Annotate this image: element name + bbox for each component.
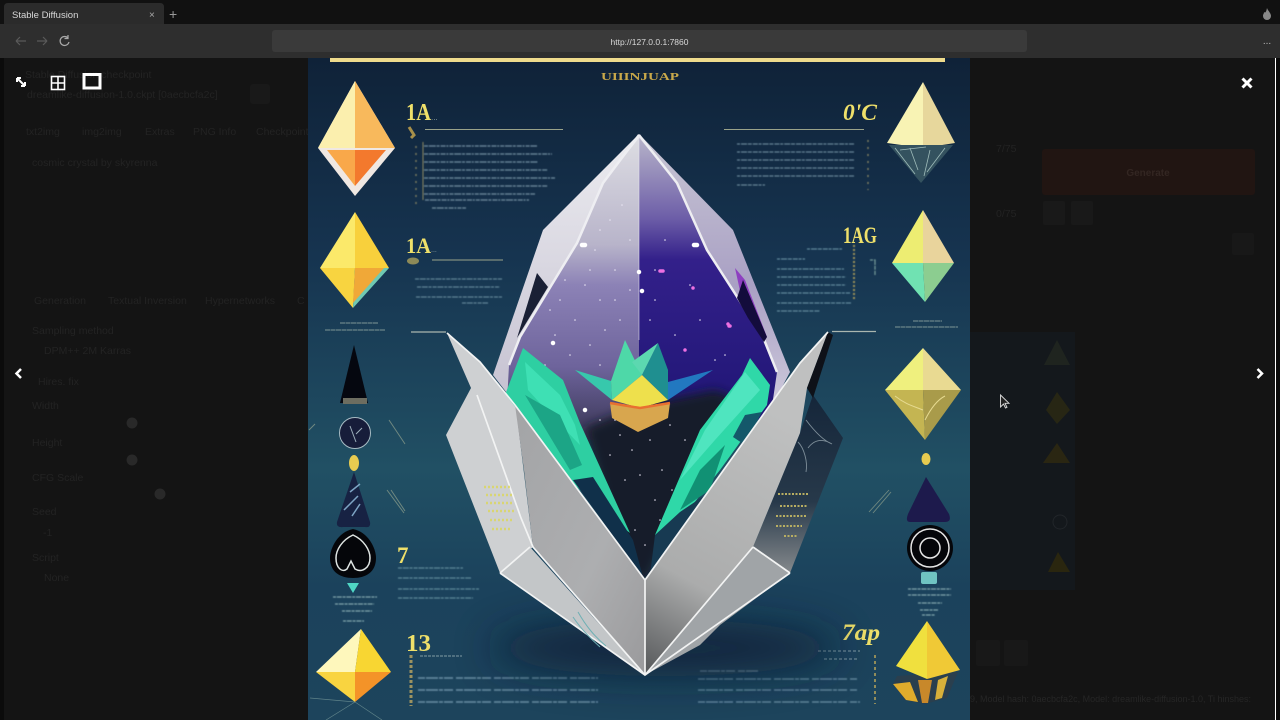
text under ring badge <box>908 589 951 615</box>
lower dark interior <box>585 390 740 585</box>
browser tab bar <box>0 0 1280 24</box>
text block: right 2 <box>777 245 875 311</box>
upper gem rim left <box>493 134 639 410</box>
text block: right 1 <box>737 140 868 190</box>
dimmed web UI controls behind the lightbox: C <box>297 295 305 307</box>
bright crystal edge lines <box>509 135 777 372</box>
heading and text: bottom left block: 13 <box>406 631 431 657</box>
decorative label lines right <box>895 321 958 327</box>
dimmed web UI controls behind the lightbox: DPM++ 2M Karras <box>44 345 131 357</box>
icon: next arrow <box>1258 369 1262 378</box>
dimmed web UI controls behind the lightbox: Hires. fix <box>38 376 80 388</box>
dimmed web UI controls behind the lightbox: Extras <box>145 126 175 138</box>
dimmed web UI controls behind the lightbox: Generation <box>34 295 86 307</box>
right purple facet <box>639 138 777 420</box>
shadow under crystal <box>490 620 840 676</box>
browser tab bar: × <box>149 10 155 21</box>
icon: teal tag <box>921 572 937 584</box>
center small gem <box>610 403 670 432</box>
right wing dark face <box>753 395 843 573</box>
icon: gem third right <box>885 348 961 440</box>
right outer purple glow <box>735 268 767 337</box>
dimmed web UI controls behind the lightbox: Seed <box>32 506 57 518</box>
icon: previous arrow <box>16 369 21 378</box>
icon: grid view <box>52 76 64 90</box>
dimmed web UI controls behind the lightbox: None <box>44 572 69 584</box>
icon: expand arrows <box>17 78 25 86</box>
dimmed web UI controls behind the lightbox: Height <box>32 437 62 449</box>
icon: black ring badge <box>907 525 953 571</box>
icon: single frame <box>84 74 100 88</box>
left green shard <box>505 348 630 533</box>
dimmed web UI controls behind the lightbox: 0/75 <box>996 208 1017 220</box>
white glints <box>553 245 718 438</box>
icon: gem top left <box>318 81 395 196</box>
left translucent facet <box>505 138 639 440</box>
dimmed web UI controls behind the lightbox: Generate <box>1126 168 1170 179</box>
heading: left block 2: 1A <box>406 233 431 258</box>
connector line right <box>832 330 876 332</box>
heading and text: left block 3: 7 <box>397 543 408 568</box>
icon: gem top right <box>887 82 955 183</box>
text block: left 2 <box>415 279 502 303</box>
heading: left block 2 <box>406 233 503 264</box>
heading and text: bottom right block: 7ap <box>842 620 880 645</box>
small diagonal lines left <box>309 420 405 513</box>
dimmed web UI controls behind the lightbox: CFG Scale <box>32 472 84 484</box>
browser toolbar <box>0 24 1280 58</box>
right wing main face <box>645 332 828 675</box>
upper gem rim right <box>639 134 790 410</box>
gold text on right wing <box>776 494 808 536</box>
heading: right block 1: 0'C <box>843 100 878 125</box>
heading and text: left block 3 <box>397 543 479 598</box>
dimmed web UI controls behind the lightbox: Checkpoint <box>256 126 309 138</box>
left dark patch <box>573 477 643 577</box>
dimmed web UI controls behind the lightbox: Sampling method <box>32 325 114 337</box>
heading: left block 1: ... <box>431 113 438 122</box>
text block: left 1 <box>416 142 555 208</box>
icon: black spike <box>340 345 368 404</box>
dimmed gallery thumbnail behind the lightbox <box>970 332 1075 590</box>
icon: gem second left <box>320 212 389 308</box>
icon: gem bottom right with gold shards <box>893 621 960 704</box>
browser toolbar: http://127.0.0.1:7860 <box>611 37 689 47</box>
heading: left block 1 <box>406 100 563 138</box>
dimmed web UI controls behind the lightbox: dreamlike-diffusion-1.0.ckpt [0aecbcfa2c] <box>27 89 218 101</box>
heading: left block 1: 1A <box>406 100 432 126</box>
right dark patch <box>650 485 720 575</box>
dimmed web UI controls behind the lightbox: Width <box>32 400 59 412</box>
dimmed web UI controls behind the lightbox: txt2img <box>26 126 60 138</box>
icon: gem second right <box>892 210 954 302</box>
heading: left block 2: ... <box>431 247 437 254</box>
left wing main face <box>515 405 645 675</box>
right window edge line <box>1275 58 1276 720</box>
dimmed web UI controls behind the lightbox: Hypernetworks <box>205 295 275 307</box>
garbled gold title: UIIINJUAP <box>601 71 679 83</box>
left wing outer face <box>446 333 533 573</box>
icon: dark cone <box>337 472 370 527</box>
teal threads below wing <box>573 612 606 647</box>
central crystal illustration <box>446 134 843 675</box>
gold text on left wing <box>484 487 514 529</box>
top gold bar <box>330 58 945 62</box>
right wing black strip <box>807 332 833 398</box>
right green shard <box>655 358 770 540</box>
dimmed web UI controls behind the lightbox: 7/75 <box>996 143 1017 155</box>
browser tab bar: Stable Diffusion <box>12 10 78 21</box>
icon: dark navy cone right <box>907 477 950 522</box>
dimmed web UI controls behind the lightbox: Textual Inversion <box>108 295 187 307</box>
seam <box>638 136 640 340</box>
icon: gem bottom left <box>310 629 391 720</box>
small diagonal line right <box>869 490 891 513</box>
bright magenta stars <box>660 271 730 350</box>
browser toolbar: ... <box>1263 36 1271 47</box>
icon: small gold drop right <box>922 453 930 465</box>
icon: mouse cursor <box>1000 395 1009 408</box>
browser tab bar: + <box>169 6 177 22</box>
dimmed web UI controls behind the lightbox: 9, Model hash: 0aecbcfa2c, Model: dreamlike-diffusion-1.0, Ti hinshes: <box>970 694 1251 704</box>
connector line left <box>411 331 446 333</box>
main generated image: blue background <box>308 58 970 720</box>
text under black heart <box>333 597 377 621</box>
wing edge highlights <box>447 332 828 675</box>
dimmed web UI controls behind the lightbox: -1 <box>43 527 52 539</box>
dimmed web UI controls behind the lightbox: Script <box>32 552 59 564</box>
heading and text: bottom left block <box>406 631 598 706</box>
icon: black heart badge <box>330 529 376 578</box>
dimmed web UI controls behind the lightbox: PNG Info <box>193 126 236 138</box>
icon: close <box>1242 78 1252 88</box>
right wing bottom face <box>645 547 790 675</box>
decorative label lines left <box>325 323 385 330</box>
heading: right block 2: 1AG <box>843 223 877 248</box>
star field <box>545 205 725 560</box>
heading and text: bottom right block <box>698 620 880 704</box>
dimmed web UI controls behind the lightbox: Stable Diffusion checkpoint <box>25 69 152 81</box>
icon: teal shield <box>347 583 359 593</box>
left wing bottom face <box>500 547 645 675</box>
left dark slit <box>517 273 548 338</box>
center star leaves <box>575 370 612 400</box>
icon: dark sphere <box>340 418 370 448</box>
line art on right wing <box>798 420 832 472</box>
dimmed web UI controls behind the lightbox: cosmic crystal by skyrenna <box>32 157 158 169</box>
dimmed web UI controls behind the lightbox: img2img <box>82 126 122 138</box>
icon: small gold drop <box>349 455 359 471</box>
right dark slit <box>737 280 767 342</box>
